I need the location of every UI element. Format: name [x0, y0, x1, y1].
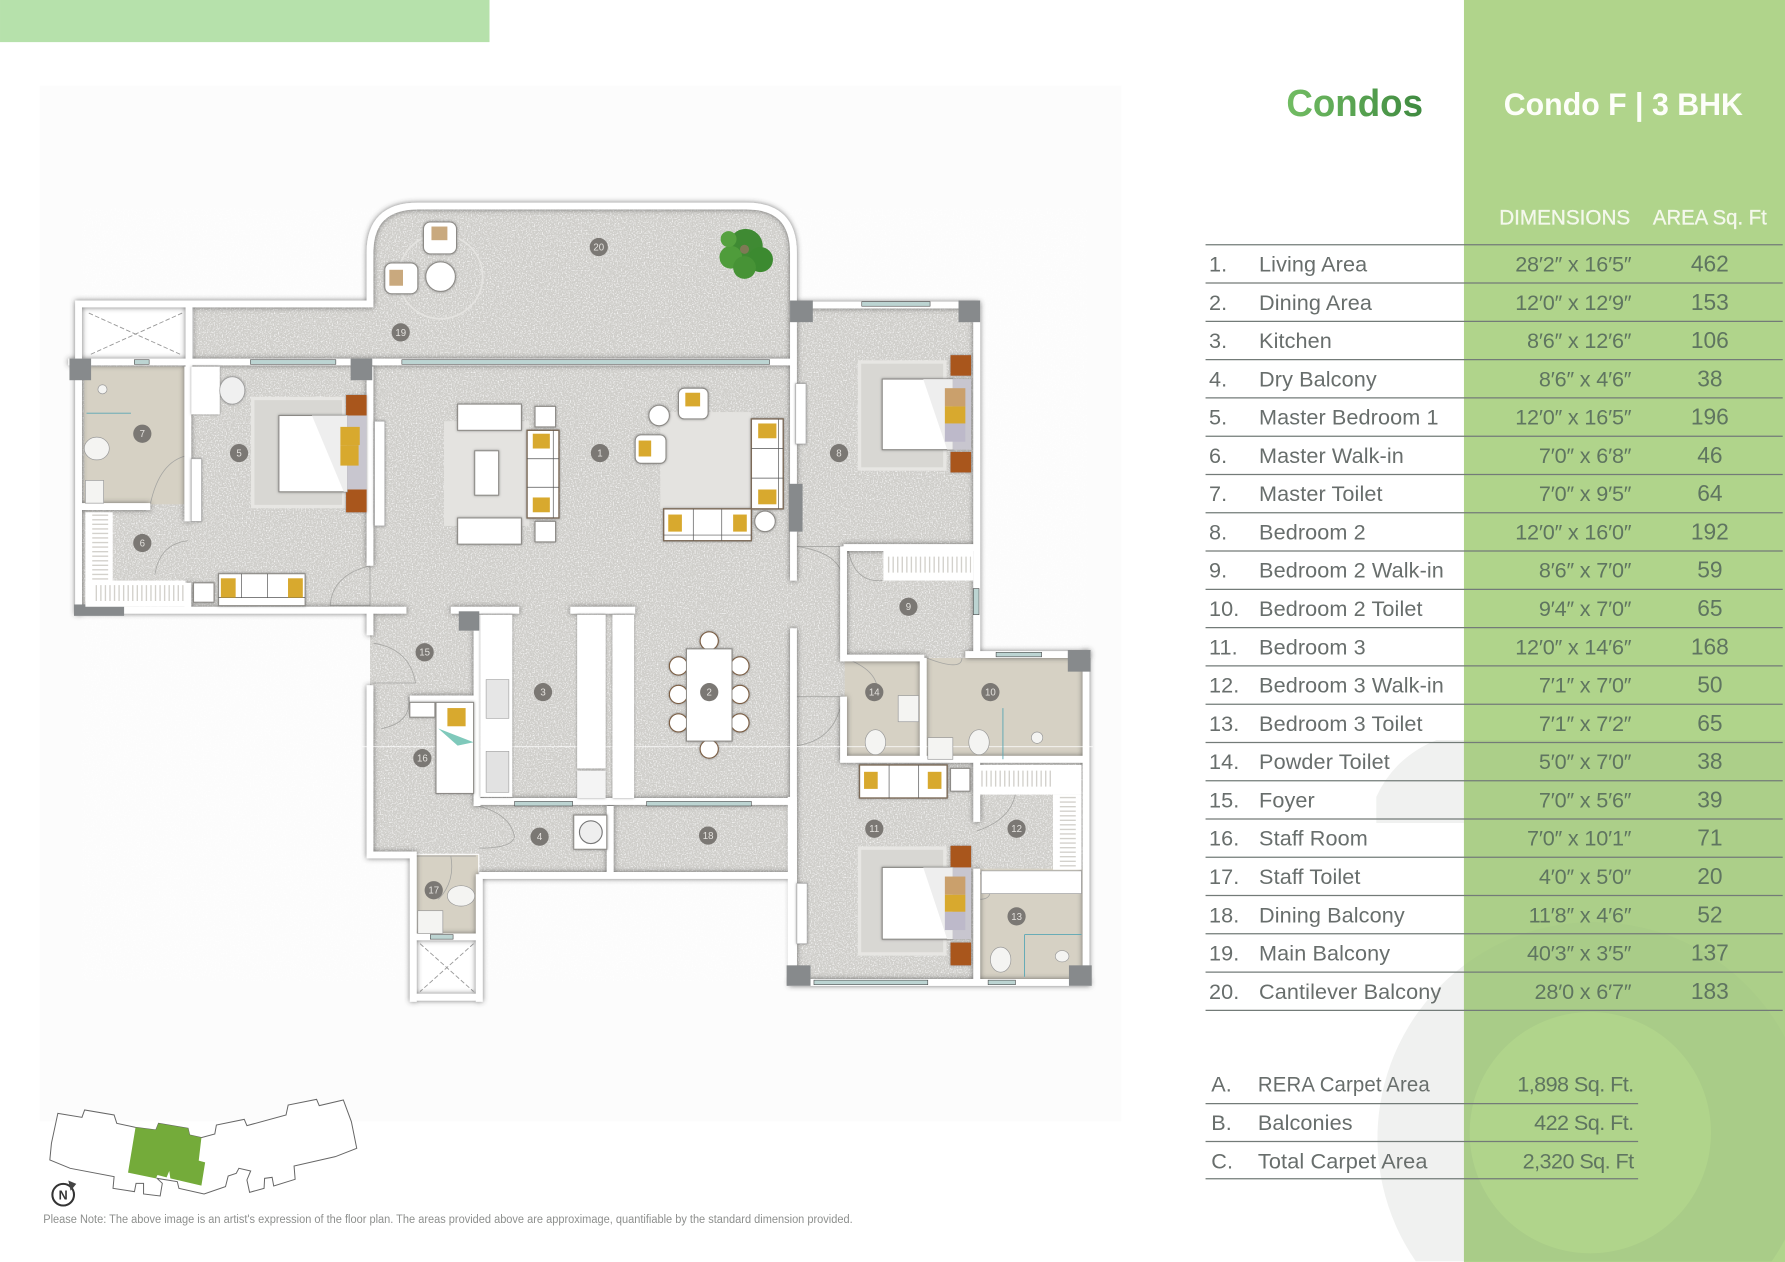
furniture: dining: [669, 632, 749, 758]
area table: 38: [1697, 748, 1723, 774]
area table: Master Toilet: [1259, 481, 1383, 506]
columns: [69, 301, 1092, 986]
area table: Dining Balcony: [1259, 902, 1405, 927]
floor: stone areas: [82, 208, 1087, 981]
green column: [1464, 0, 1785, 1262]
area table: 12′0″ x 16′0″: [1515, 519, 1632, 544]
plan panel tint: [40, 85, 1121, 1121]
area table: 5′0″ x 7′0″: [1539, 749, 1632, 774]
floor: bathrooms: [84, 367, 1084, 980]
room number badges: 2: [707, 688, 712, 699]
floor plan: [68, 206, 1093, 1002]
windows: [134, 302, 1042, 985]
area table: 9′4″ x 7′0″: [1539, 596, 1632, 621]
area table: 28′2″ x 16′5″: [1515, 252, 1632, 277]
area table: 8′6″ x 4′6″: [1539, 366, 1632, 391]
room number badges: 1: [597, 448, 603, 459]
area table: Cantilever Balcony: [1259, 979, 1441, 1004]
area table: Bedroom 3 Toilet: [1259, 711, 1423, 736]
area table: 2.: [1209, 290, 1227, 315]
door swings: [150, 455, 1015, 899]
area table: 7′0″ x 10′1″: [1527, 826, 1632, 851]
bathroom fixtures: [84, 385, 1081, 972]
pale decorative circles on white: [1376, 740, 1464, 1261]
room number badges: 4: [537, 832, 543, 843]
room number badges: 16: [417, 754, 428, 765]
area table: 7′1″ x 7′0″: [1539, 673, 1632, 698]
furniture: staff bed: [410, 702, 474, 793]
furniture: balcony washer: [574, 815, 607, 849]
area table: 4.: [1209, 366, 1227, 391]
room number badges: 17: [428, 886, 439, 897]
summary table: A.: [1211, 1072, 1232, 1097]
area table: Bedroom 3: [1259, 634, 1366, 659]
area table: Staff Toilet: [1259, 864, 1361, 889]
area table: 52: [1697, 901, 1723, 927]
room number badges: 12: [1011, 824, 1022, 835]
area table: 462: [1691, 251, 1729, 277]
summary table: RERA Carpet Area: [1258, 1072, 1431, 1097]
furniture: living right group: [635, 388, 783, 541]
furniture: living left group: [458, 404, 559, 544]
room number badges: 6: [140, 538, 145, 549]
key plan: [50, 1099, 357, 1196]
rugs: [253, 362, 945, 954]
area table: 50: [1697, 672, 1723, 698]
furniture: balcony seating: [385, 222, 457, 294]
summary table: 1,898 Sq. Ft.: [1517, 1072, 1634, 1097]
furniture: master sofa: [194, 574, 305, 606]
title: Condo F 3 BHK: Condo F | 3 BHK: [1504, 87, 1743, 122]
area table: 4′0″ x 5′0″: [1539, 864, 1632, 889]
north compass icon: [52, 1180, 76, 1206]
room number badges: 13: [1011, 912, 1022, 923]
room number badges: 10: [985, 688, 996, 699]
room number badges: 15: [419, 648, 430, 659]
area table: 64: [1697, 480, 1723, 506]
summary table: B.: [1211, 1110, 1232, 1135]
area table: 40′3″ x 3′5″: [1527, 941, 1632, 966]
column headers: DIMENSIONS: [1499, 206, 1630, 229]
area table: Master Walk-in: [1259, 443, 1404, 468]
summary table: 422 Sq. Ft.: [1534, 1110, 1634, 1135]
living rugs: [398, 235, 751, 526]
column headers: AREA Sq. Ft: [1653, 206, 1767, 229]
shafts: [85, 310, 476, 994]
area table: 8′6″ x 12′6″: [1527, 328, 1632, 353]
area table: 59: [1697, 557, 1723, 583]
area table: 14.: [1209, 749, 1239, 774]
area table: 1.: [1209, 252, 1227, 277]
area table: Bedroom 2 Walk-in: [1259, 558, 1444, 583]
area table: 8′6″ x 7′0″: [1539, 558, 1632, 583]
thin horizontal line: [362, 746, 1093, 748]
area table: Main Balcony: [1259, 941, 1390, 966]
area table: 46: [1697, 442, 1723, 468]
area table: 12′0″ x 14′6″: [1515, 634, 1632, 659]
area table: 6.: [1209, 443, 1227, 468]
area table: 18.: [1209, 902, 1239, 927]
area table: 7′0″ x 9′5″: [1539, 481, 1632, 506]
furniture: wardrobes: [85, 512, 1081, 870]
walls: [68, 206, 1091, 1002]
room number badges: 3: [540, 688, 546, 699]
area table: 19.: [1209, 941, 1239, 966]
area table: 39: [1697, 786, 1723, 812]
furniture: master bedroom: [191, 367, 385, 526]
area table: 17.: [1209, 864, 1239, 889]
area table: 168: [1691, 633, 1729, 659]
area table: 65: [1697, 710, 1723, 736]
area table: 28′0 x 6′7″: [1535, 979, 1632, 1004]
room number badges: 11: [869, 824, 879, 835]
area table: 183: [1691, 978, 1729, 1004]
room number badges: 18: [703, 831, 713, 842]
room number badges: [133, 238, 1026, 925]
area table: Master Bedroom 1: [1259, 405, 1439, 430]
disclaimer note: Please Note: The above image is an artist's expression of the floor plan. The areas provided above are approximage, quantifiable by the standard dimension provided.: [43, 1213, 853, 1226]
north compass icon: N: [59, 1188, 68, 1202]
area table: 7.: [1209, 481, 1227, 506]
area table: 15.: [1209, 787, 1239, 812]
area table: 3.: [1209, 328, 1227, 353]
room number badges: 8: [836, 448, 842, 459]
area table: 9.: [1209, 558, 1227, 583]
furniture: kitchen: [480, 615, 634, 798]
area table: 38: [1697, 365, 1723, 391]
summary table: 2,320 Sq. Ft: [1523, 1149, 1634, 1174]
area table: 196: [1691, 404, 1729, 430]
area table: 12.: [1209, 673, 1239, 698]
area table: Living Area: [1259, 252, 1368, 277]
area table: Powder Toilet: [1259, 749, 1390, 774]
furniture: bedroom 2: [796, 355, 971, 472]
area table: 10.: [1209, 596, 1239, 621]
area table: Foyer: [1259, 787, 1315, 812]
furniture: bedroom 3: [797, 765, 971, 965]
shower glass lines: [87, 413, 1081, 977]
area table: 7′0″ x 6′8″: [1539, 443, 1632, 468]
area table: 192: [1691, 518, 1729, 544]
area table: 16.: [1209, 826, 1239, 851]
area table: Bedroom 2 Toilet: [1259, 596, 1423, 621]
area table: Dry Balcony: [1259, 366, 1377, 391]
area table: 11.: [1209, 634, 1238, 659]
area table: 5.: [1209, 405, 1227, 430]
area table: 12′0″ x 12′9″: [1515, 290, 1632, 315]
area table: 65: [1697, 595, 1723, 621]
area table: 8.: [1209, 519, 1227, 544]
area table: 11′8″ x 4′6″: [1529, 902, 1632, 927]
area table: Staff Room: [1259, 826, 1368, 851]
area table: 106: [1691, 327, 1729, 353]
area table: Bedroom 2: [1259, 519, 1366, 544]
area table: Bedroom 3 Walk-in: [1259, 673, 1444, 698]
wide wall: [788, 797, 797, 979]
area table: 20: [1697, 863, 1723, 889]
area table: 71: [1697, 825, 1723, 851]
summary table: [1206, 1072, 1638, 1179]
area table: 12′0″ x 16′5″: [1515, 405, 1632, 430]
top accent bar: [0, 0, 490, 42]
room number badges: 7: [140, 429, 145, 440]
room number badges: 20: [593, 242, 604, 253]
area table: 7′0″ x 5′6″: [1539, 787, 1632, 812]
summary table: Total Carpet Area: [1258, 1149, 1428, 1174]
room number badges: 14: [869, 688, 880, 699]
area table: Dining Area: [1259, 290, 1373, 315]
area table: 20.: [1209, 979, 1239, 1004]
title: Condos: Condos: [1286, 82, 1423, 125]
room number badges: 5: [236, 448, 242, 459]
room number badges: 19: [395, 328, 406, 339]
area table: 137: [1691, 940, 1729, 966]
summary table: C.: [1211, 1149, 1233, 1174]
summary table: Balconies: [1258, 1110, 1353, 1135]
column headers: [1499, 206, 1767, 229]
area table: 13.: [1209, 711, 1239, 736]
area table: 7′1″ x 7′2″: [1539, 711, 1632, 736]
plant: [719, 229, 773, 279]
area table: 153: [1691, 289, 1729, 315]
area table: [1206, 245, 1783, 1010]
room number badges: 9: [906, 602, 911, 613]
area table: Kitchen: [1259, 328, 1332, 353]
